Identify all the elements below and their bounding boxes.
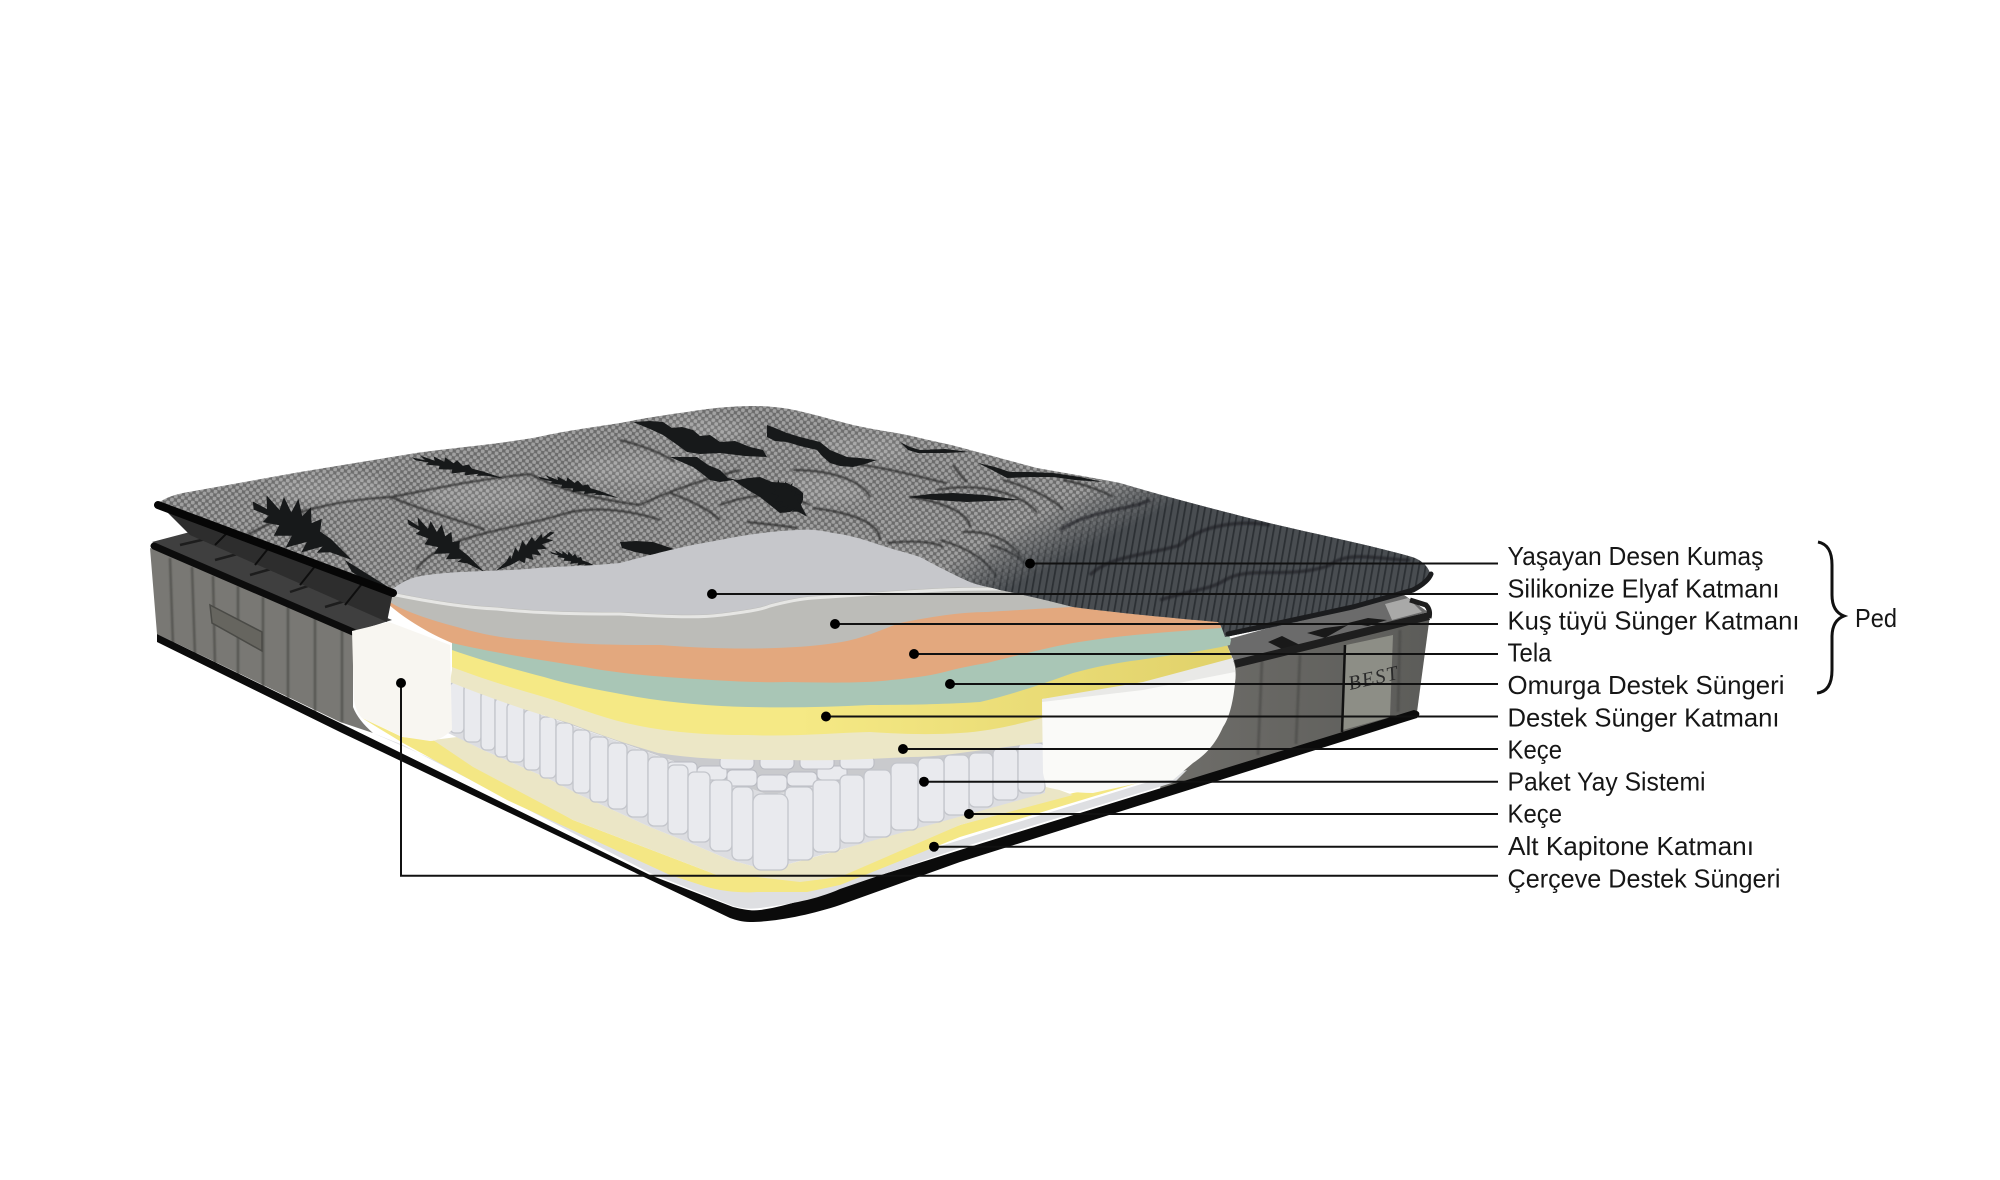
pillow top piping, left	[158, 505, 393, 593]
base: left side panel	[150, 548, 373, 733]
lower yellow layer	[362, 718, 1187, 892]
bottom quilted layer	[373, 733, 1187, 909]
dark knit section	[950, 482, 1430, 637]
label tag text: BEST	[1346, 662, 1402, 695]
label: Keçe (lower): Keçe	[1508, 799, 1562, 829]
right frame support foam	[1042, 660, 1236, 793]
label: Destek Sünger Katmanı	[821, 702, 1780, 732]
label: Tela: Tela	[1508, 638, 1552, 668]
label: Silikonize Elyaf Katmanı	[707, 573, 1780, 603]
label: Alt Kapitone Katmanı: Alt Kapitone Katmanı	[1508, 831, 1754, 861]
lower felt layer	[433, 737, 1073, 882]
label: Omurga Destek Süngeri: Omurga Destek Süngeri	[1508, 670, 1784, 700]
pillow top fabric	[150, 400, 1440, 650]
upper yellow support layer	[452, 640, 1233, 736]
upper felt layer	[450, 650, 1045, 760]
base: right side panel with label tag	[1160, 615, 1430, 790]
spine support foam layer	[452, 620, 1231, 707]
silicone fibre layer	[391, 500, 1010, 615]
brace grouping pad layers	[1817, 542, 1844, 693]
label: Keçe (upper)	[898, 734, 1562, 764]
label: Destek Sünger Katmanı: Destek Sünger Katmanı	[1508, 702, 1780, 732]
label: Tela	[909, 638, 1552, 668]
label: Çerçeve Destek Süngeri	[396, 678, 1780, 893]
label: Omurga Destek Süngeri	[945, 670, 1784, 700]
left frame support foam	[352, 622, 452, 741]
label: Paket Yay Sistemi	[919, 767, 1706, 797]
gray feather foam layer	[387, 520, 1100, 649]
base: right quilted top strip and binding	[1225, 592, 1430, 664]
quilting seams	[244, 440, 1113, 577]
label: Kuş tüyü Sünger Katmanı	[830, 606, 1800, 636]
mattress illustration	[150, 400, 1440, 922]
pillow top piping, right	[1228, 574, 1431, 634]
label: Yaşayan Desen Kumaş: Yaşayan Desen Kumaş	[1508, 541, 1764, 571]
pillow top underside, left	[160, 505, 393, 622]
label: Çerçeve Destek Süngeri: Çerçeve Destek Süngeri	[1508, 863, 1780, 893]
brace label: Ped: Ped	[1855, 603, 1897, 633]
label: Paket Yay Sistemi: Paket Yay Sistemi	[1508, 767, 1706, 797]
dark section seams	[1060, 500, 1410, 600]
label: Alt Kapitone Katmanı	[929, 831, 1754, 861]
base: black bottom binding	[157, 634, 1419, 922]
infographic: mattress cross-section with labelled layers	[150, 406, 1896, 922]
label: Keçe (upper): Keçe	[1508, 734, 1562, 764]
callout labels	[396, 541, 1800, 893]
label: Keçe (lower)	[964, 799, 1562, 829]
fabric lump highlights	[270, 418, 910, 511]
base: side handle	[210, 605, 262, 651]
pocket spring system	[448, 682, 1045, 870]
fabric interlining orange layer	[387, 560, 1221, 683]
label: Kuş tüyü Sünger Katmanı: Kuş tüyü Sünger Katmanı	[1508, 606, 1800, 636]
black feather pattern	[241, 421, 1103, 590]
label: Yaşayan Desen Kumaş	[1025, 541, 1764, 571]
label: Silikonize Elyaf Katmanı: Silikonize Elyaf Katmanı	[1508, 573, 1780, 603]
base: left quilted top strip	[152, 532, 392, 632]
